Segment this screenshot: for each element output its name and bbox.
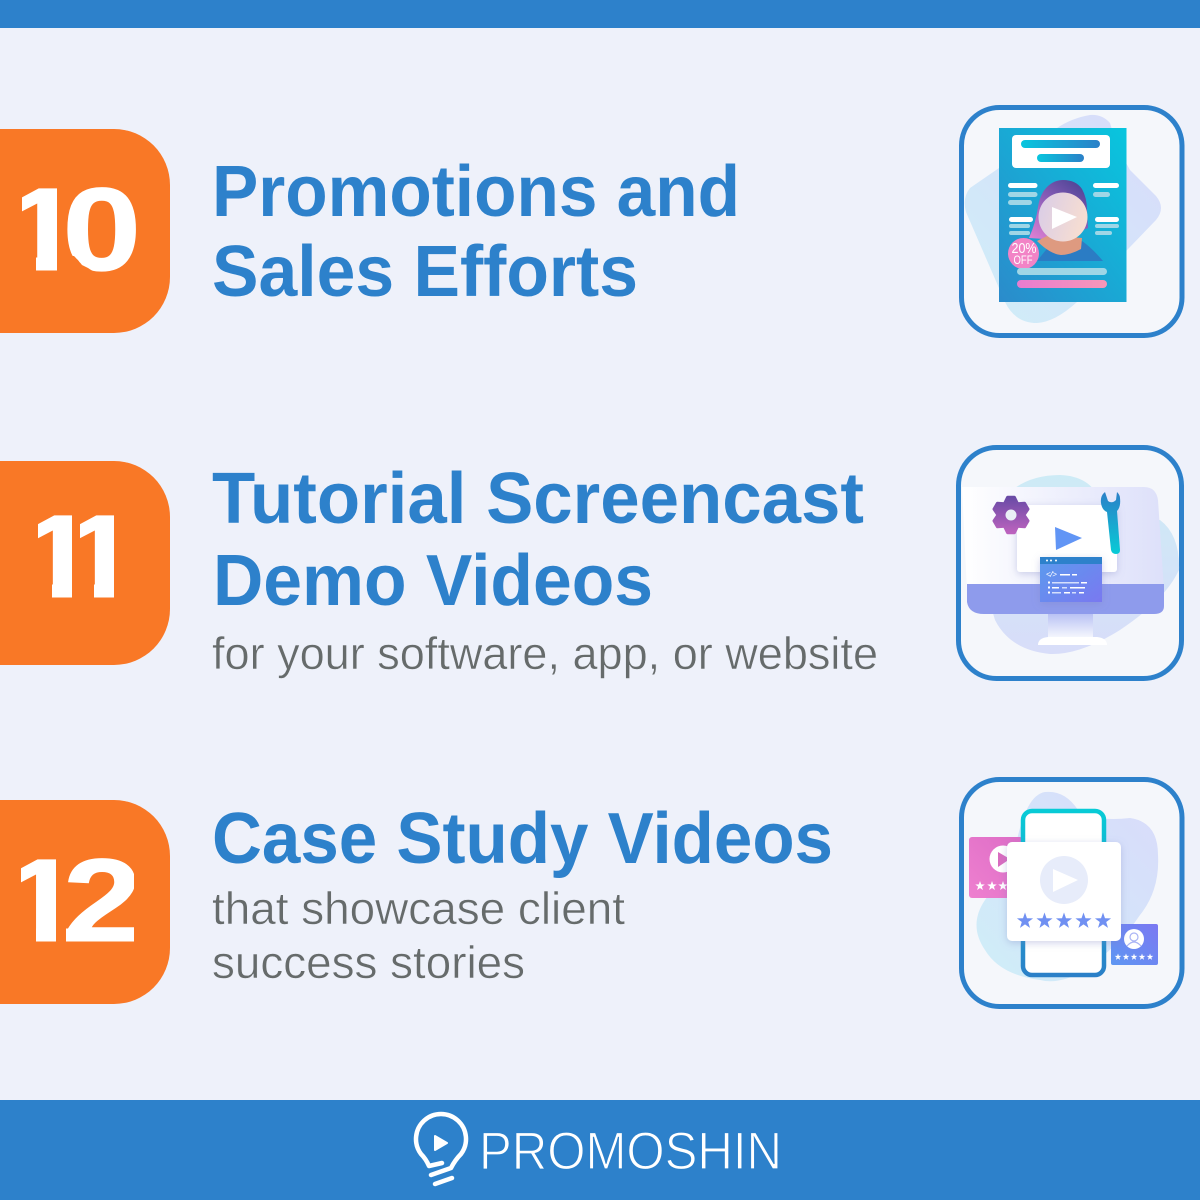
icon card: monitor with tutorial video (958, 448, 1182, 678)
number badge 11 (0, 461, 170, 665)
subtext: for your software: for your software, app, or website (212, 628, 878, 679)
icon card: promotional poster: 20% (1012, 240, 1036, 257)
heading: Promotions and Sales Efforts (212, 152, 740, 312)
number badge 10: 10 (5, 163, 141, 295)
icon card: monitor with tutorial video: </> (1046, 571, 1057, 580)
heading: Tutorial Screencast Demo Videos (212, 459, 864, 621)
icon card: promotional poster: OFF (1014, 255, 1032, 267)
logo wordmark: PROMOSHIN (479, 1122, 782, 1181)
icon card: phone with star rating (962, 780, 1182, 1006)
heading: Tutorial Screencast Demo Videos: Demo Videos (213, 541, 653, 621)
item 10 (0, 108, 1182, 336)
logo: lightbulb play icon (416, 1114, 466, 1184)
number badge 12 (0, 800, 170, 1004)
subtext: that showcase client success stories (212, 883, 625, 988)
number badge 11: 11 (20, 490, 141, 622)
heading: Tutorial Screencast Demo Videos: Tutorial Screencast (212, 459, 864, 539)
heading: Promotions and Sales Efforts: Sales Efforts (212, 232, 638, 312)
footer bar (0, 1100, 1200, 1200)
top bar (0, 0, 1200, 28)
subtext: that showcase client success stories: that showcase client (212, 883, 625, 934)
item 12 (0, 780, 1182, 1006)
heading: Promotions and Sales Efforts: Promotions and (212, 152, 740, 232)
item 11 (0, 448, 1182, 679)
heading: Case Study Videos: Case Study Videos (212, 799, 833, 879)
number badge 12: 12 (4, 834, 142, 966)
number badge 10 (0, 129, 170, 333)
subtext: that showcase client success stories: success stories (212, 937, 525, 988)
icon card: promotional poster (962, 108, 1182, 336)
